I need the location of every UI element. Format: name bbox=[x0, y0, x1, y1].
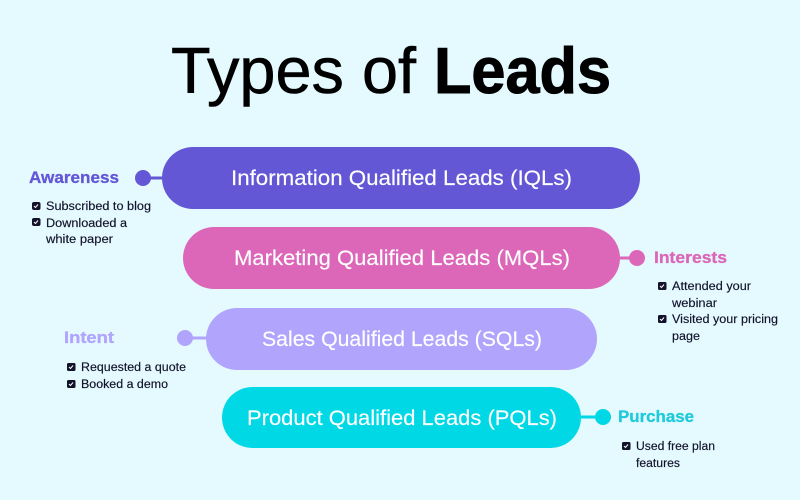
list: awareness: Downloaded a bbox=[46, 218, 128, 230]
panel: marketing qualified leads bbox=[183, 227, 620, 289]
list: interests: page bbox=[672, 331, 700, 343]
list: interests: Attended your bbox=[672, 281, 751, 293]
connector: awareness bbox=[135, 170, 165, 186]
panel: sales qualified leads bbox=[206, 308, 597, 370]
list: intent: Booked a demo bbox=[81, 379, 168, 391]
list: interests bbox=[658, 281, 778, 343]
heading: purchase: Purchase bbox=[618, 408, 694, 426]
list: intent: Requested a quote bbox=[81, 362, 186, 374]
panel: marketing qualified leads: Marketing Qualified Leads (MQLs) bbox=[234, 246, 570, 270]
heading: interests: Interests bbox=[654, 249, 727, 267]
connector: intent bbox=[177, 330, 209, 346]
list: intent bbox=[67, 362, 186, 391]
list: awareness: Subscribed to blog bbox=[46, 201, 151, 213]
title bbox=[171, 34, 611, 107]
panel: product qualified leads bbox=[222, 387, 581, 448]
panel: information qualified leads: Information Qualified Leads (IQLs) bbox=[231, 166, 572, 190]
connector: interests bbox=[617, 250, 645, 266]
list: interests: webinar bbox=[671, 298, 717, 310]
list: purchase bbox=[622, 441, 715, 470]
connector: purchase bbox=[578, 409, 611, 425]
list: awareness: white paper bbox=[45, 234, 113, 246]
list: awareness bbox=[32, 201, 151, 246]
panel: product qualified leads: Product Qualified Leads (PQLs) bbox=[247, 406, 557, 430]
title: Leads bbox=[434, 34, 611, 107]
list: purchase: features bbox=[636, 458, 680, 470]
list: interests: Visited your pricing bbox=[672, 314, 778, 326]
heading: awareness: Awareness bbox=[29, 169, 119, 187]
list: purchase: Used free plan bbox=[636, 441, 715, 453]
title: Types of bbox=[171, 34, 417, 107]
panel: sales qualified leads: Sales Qualified Leads (SQLs) bbox=[262, 327, 542, 351]
panel: information qualified leads bbox=[162, 147, 640, 209]
heading: intent: Intent bbox=[64, 329, 115, 347]
